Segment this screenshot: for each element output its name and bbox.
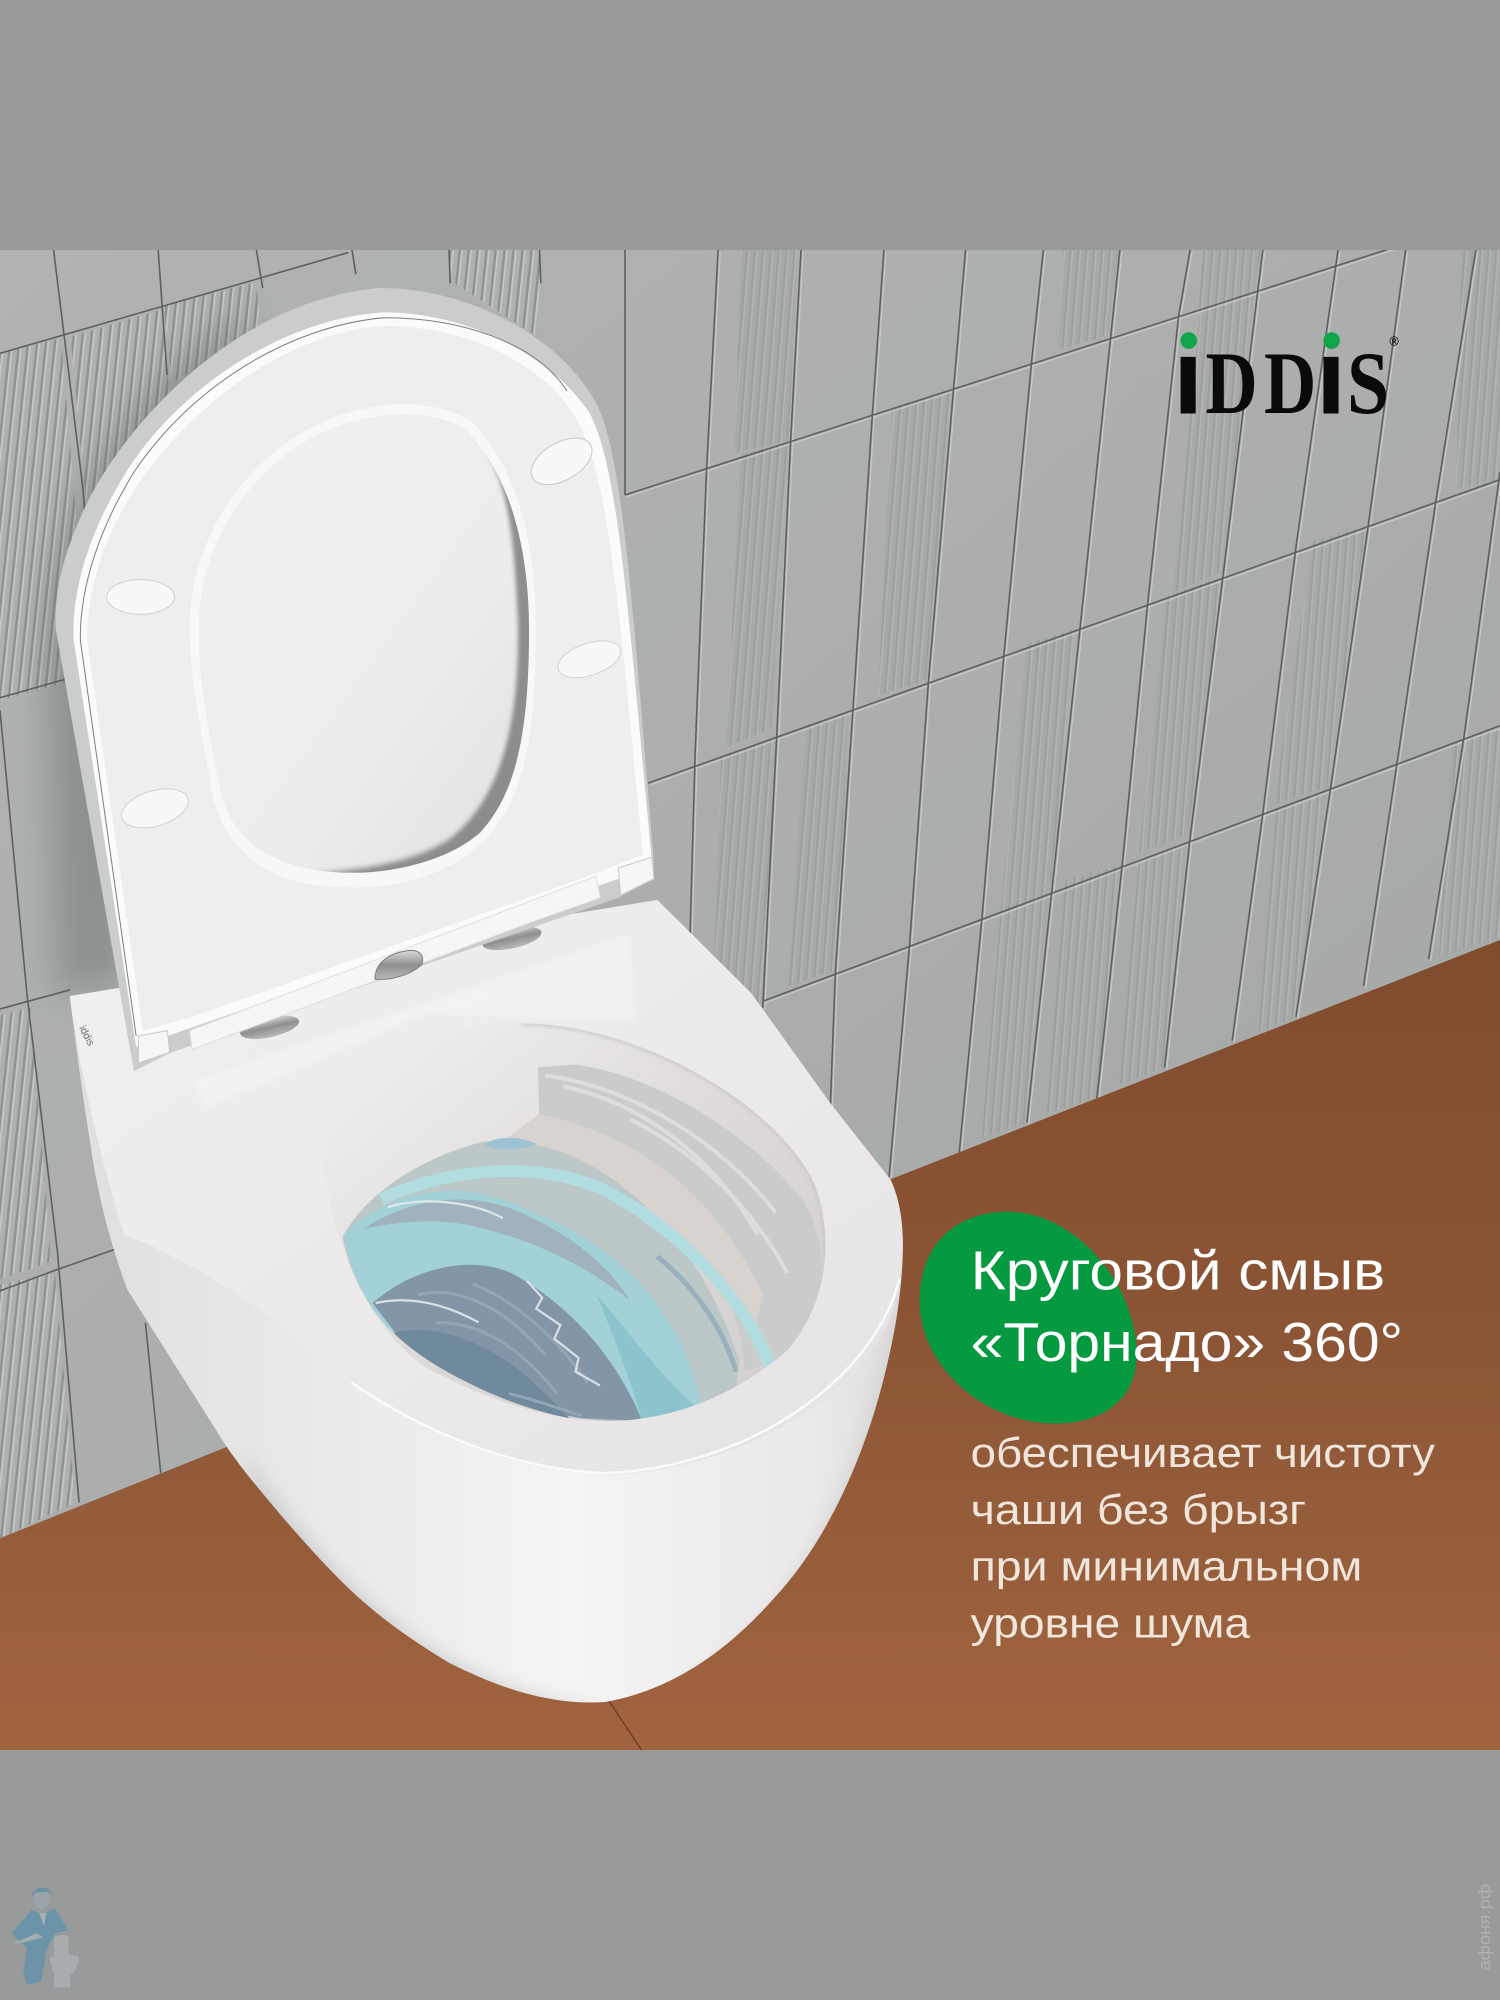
logo: D (1264, 334, 1316, 433)
inner surface (87, 326, 643, 1031)
logo (1175, 332, 1399, 433)
brand mark on ceramic: iddis (76, 1024, 96, 1048)
rim top surface (70, 900, 903, 1475)
mascot legs (23, 1947, 47, 1985)
photo scene (0, 244, 1500, 1760)
floor tile seam (608, 1700, 642, 1750)
inner edge shadow (520, 1024, 826, 1288)
rim front highlight (351, 1278, 900, 1473)
chrome button (375, 950, 423, 979)
wall shadow behind the lid (45, 306, 255, 995)
mascot shirt (39, 1913, 47, 1926)
floor (0, 940, 1500, 1750)
rubber bumper right upper (526, 429, 597, 494)
chrome hinges (238, 922, 544, 1043)
flush shelf (538, 1065, 821, 1372)
teal water (344, 1191, 703, 1418)
vortex strokes (418, 1284, 588, 1416)
rubber bumper left lower (119, 782, 191, 834)
description: обеспечивает чистоту (971, 1429, 1435, 1476)
hole outer ring (190, 404, 536, 888)
grey wave (364, 1199, 630, 1300)
toilet seat lid (56, 288, 654, 1071)
logo: I (1318, 341, 1344, 431)
hole recess (188, 396, 545, 890)
bowl opening (342, 1024, 826, 1421)
ceramic body (70, 900, 903, 1702)
grey vortex (373, 1265, 642, 1421)
logo: S (1347, 334, 1389, 433)
logo: ® (1389, 334, 1399, 349)
dark edge line (80, 318, 567, 1036)
description: чаши без брызг (971, 1486, 1306, 1533)
heading: Круговой смыв (971, 1240, 1385, 1302)
water pool (342, 1141, 739, 1422)
green blob (920, 1212, 1137, 1424)
description: уровне шума (971, 1600, 1251, 1647)
blue spot (485, 1138, 536, 1149)
streak (657, 1257, 736, 1372)
rubber bumper left upper (107, 580, 175, 614)
site watermark: афоня.рф (1475, 1884, 1494, 1971)
heading (971, 1240, 1403, 1373)
mascot toilet (49, 1934, 80, 1988)
white foam (376, 1201, 600, 1385)
logo: D (1205, 334, 1258, 433)
teal crest (597, 1296, 694, 1418)
mascot jacket (12, 1908, 68, 1950)
mascot hair (32, 1888, 52, 1897)
description: при минимальном (971, 1542, 1362, 1589)
outer shell (56, 288, 654, 1071)
hinge band (190, 876, 600, 1050)
logo green dots (1180, 332, 1340, 349)
description (971, 1429, 1435, 1647)
teal band (382, 1171, 772, 1372)
toilet bowl (70, 900, 903, 1702)
mascot head (34, 1889, 50, 1909)
logo: I (1175, 341, 1202, 431)
white edge (73, 312, 652, 1047)
vortex core (394, 1330, 570, 1418)
rubber bumper right lower (555, 634, 624, 685)
mascot watermark (12, 1888, 80, 1988)
mascot wrench (13, 1933, 43, 1944)
tiled wall (0, 244, 1500, 1551)
heading: «Торнадо» 360° (971, 1311, 1403, 1373)
rim glossy highlight (194, 933, 636, 1108)
